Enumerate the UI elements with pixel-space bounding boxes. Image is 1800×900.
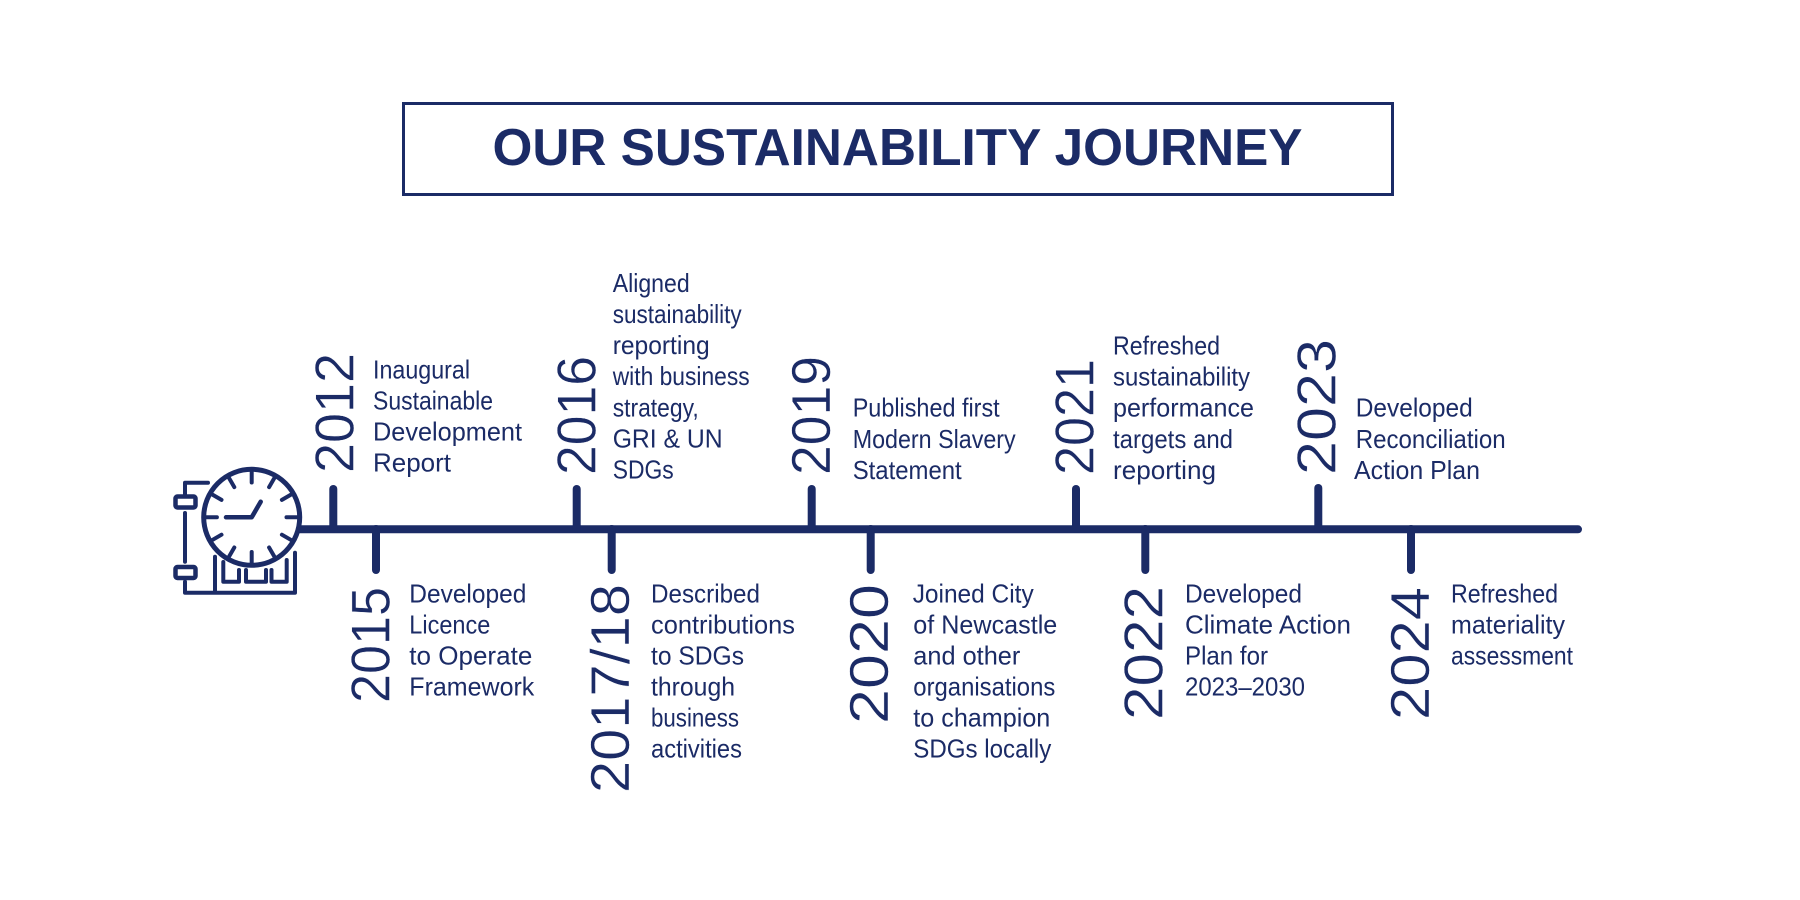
milestone 2016: 2016 <box>546 356 608 475</box>
milestone 2020: SDGs locally <box>913 733 1051 763</box>
milestone 2020: of Newcastle <box>913 609 1057 639</box>
milestone 2024: 2024 <box>1379 587 1441 720</box>
milestone 2019: 2019 <box>780 356 842 475</box>
milestone 2012: Development <box>373 416 523 446</box>
milestone 2017/18: through <box>651 671 735 701</box>
milestone 2012 <box>304 353 523 529</box>
milestone 2022: Developed <box>1185 578 1302 608</box>
milestone 2015: Framework <box>409 671 535 701</box>
milestone 2016: sustainability <box>613 299 742 329</box>
milestone 2015: 2015 <box>340 587 402 703</box>
milestone 2021: reporting <box>1113 455 1216 485</box>
milestone 2016: with business <box>612 361 750 391</box>
milestone 2012: Sustainable <box>373 386 493 416</box>
milestone 2024 <box>1379 529 1574 720</box>
milestone 2019: Statement <box>853 455 962 485</box>
title box <box>404 104 1392 194</box>
milestone 2017/18: business <box>651 702 739 732</box>
milestone 2016: strategy, <box>613 392 699 422</box>
milestone 2017/18: to SDGs <box>651 640 744 670</box>
milestone 2017/18 <box>579 529 795 793</box>
milestone 2012: Inaugural <box>373 355 470 385</box>
milestone 2012: Report <box>373 447 452 477</box>
milestone 2012: 2012 <box>304 353 366 473</box>
milestone 2023: Action Plan <box>1354 455 1480 485</box>
milestone 2019: Modern Slavery <box>853 424 1016 454</box>
milestone 2022 <box>1112 529 1351 720</box>
milestone 2017/18: activities <box>651 733 742 763</box>
milestone 2022: Climate Action <box>1185 609 1351 639</box>
milestone 2020: Joined City <box>913 578 1034 608</box>
milestone 2022: Plan for <box>1185 640 1268 670</box>
milestone 2017/18: contributions <box>651 609 795 639</box>
title: OUR SUSTAINABILITY JOURNEY <box>492 119 1302 177</box>
milestone 2016: reporting <box>613 330 710 360</box>
milestone 2022: 2022 <box>1112 586 1174 720</box>
milestone 2021 <box>1044 331 1254 529</box>
milestone 2024: assessment <box>1451 640 1574 670</box>
milestone 2015: Licence <box>409 609 490 639</box>
milestone 2017/18: Described <box>651 578 760 608</box>
milestone 2017/18: 2017/18 <box>579 584 641 793</box>
milestone 2022: 2023–2030 <box>1185 671 1305 701</box>
milestone 2021: performance <box>1113 393 1254 423</box>
milestone 2016: GRI & UN <box>613 424 723 454</box>
milestone 2015 <box>340 529 535 703</box>
milestone 2023: 2023 <box>1286 339 1348 475</box>
milestone 2024: materiality <box>1451 609 1565 639</box>
milestone 2015: Developed <box>409 578 526 608</box>
milestone 2020: organisations <box>913 671 1055 701</box>
milestone 2020: to champion <box>913 702 1050 732</box>
milestone 2016 <box>546 268 750 529</box>
milestone 2016: SDGs <box>613 454 674 484</box>
milestone 2020: 2020 <box>838 584 900 724</box>
icon: clock with circuit <box>176 469 300 593</box>
milestone 2023 <box>1286 339 1506 529</box>
milestone 2019: Published first <box>853 393 1000 423</box>
milestone 2019 <box>780 356 1016 529</box>
milestone 2023: Reconciliation <box>1356 424 1506 454</box>
milestone 2021: 2021 <box>1044 359 1106 475</box>
milestone 2020 <box>838 529 1057 763</box>
milestone 2023: Developed <box>1356 393 1473 423</box>
milestone 2021: Refreshed <box>1113 331 1220 361</box>
milestone 2021: targets and <box>1113 424 1233 454</box>
milestone 2015: to Operate <box>409 640 532 670</box>
milestone 2016: Aligned <box>613 268 690 298</box>
milestone 2020: and other <box>913 640 1021 670</box>
timeline axis <box>296 525 1578 533</box>
milestone 2024: Refreshed <box>1451 578 1558 608</box>
milestone 2021: sustainability <box>1113 362 1250 392</box>
